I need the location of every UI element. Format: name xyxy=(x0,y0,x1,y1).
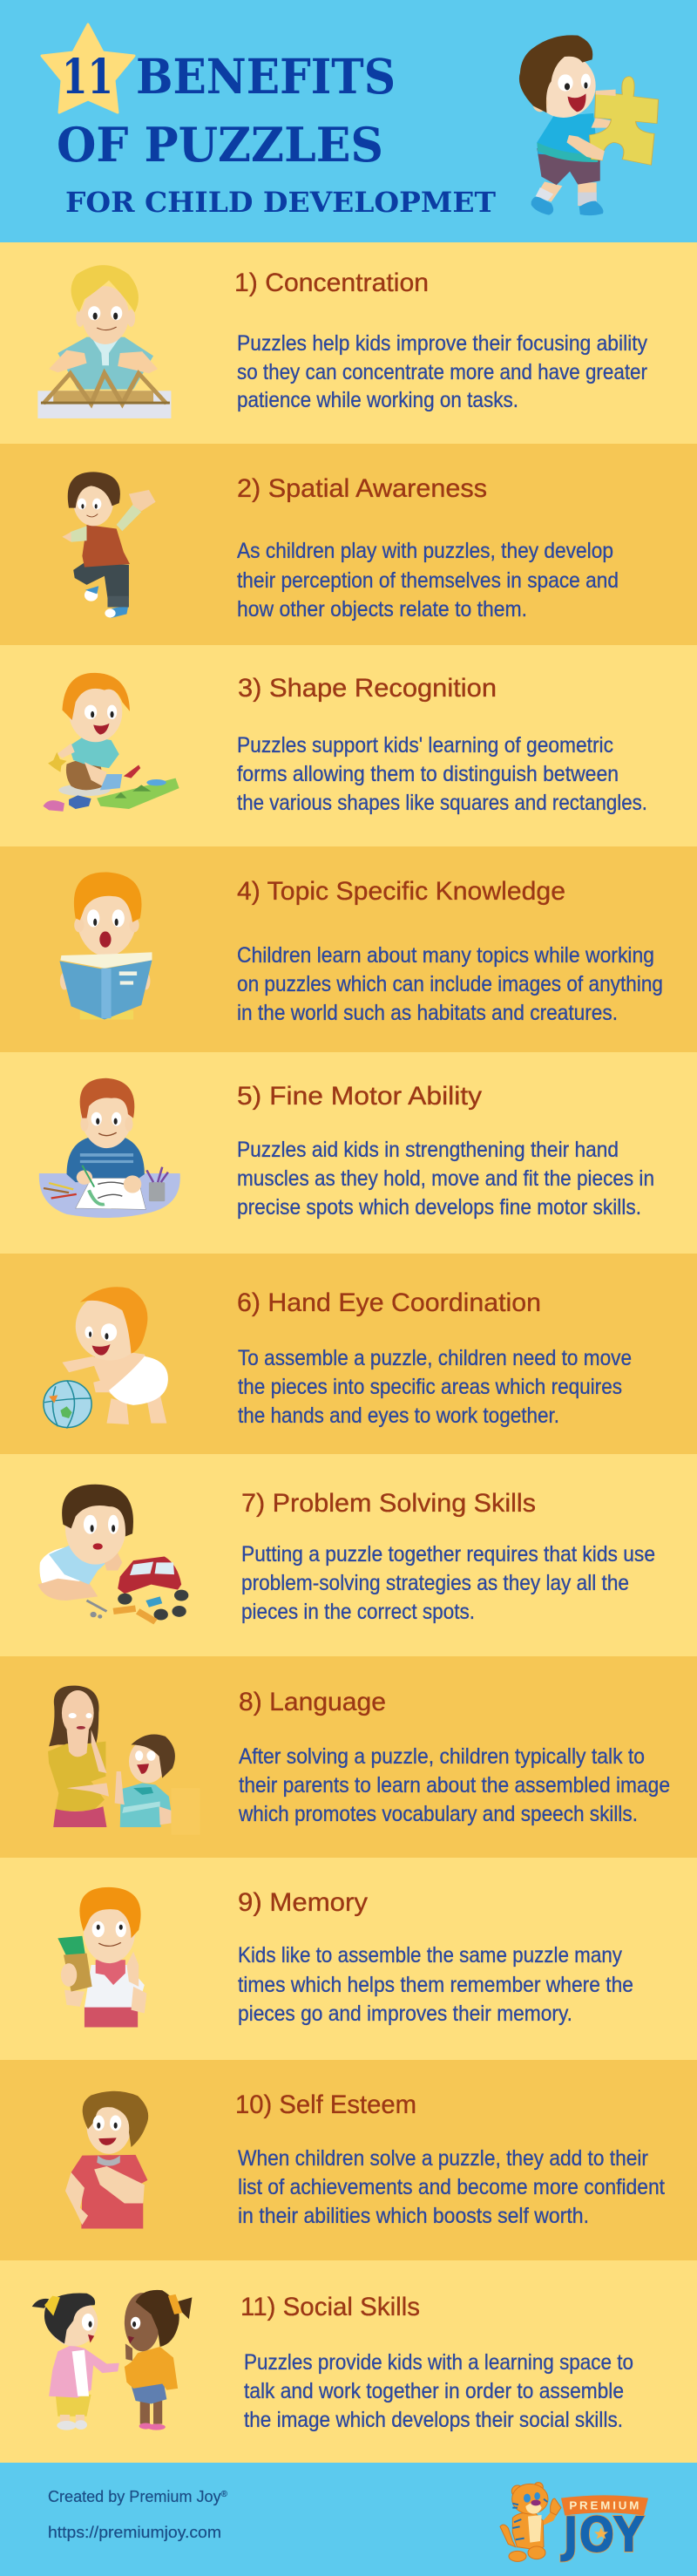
text block: which promotes vocabulary and speech skills. xyxy=(238,1802,638,1826)
heading: 3) Shape Recognition xyxy=(238,674,497,703)
text block: times which helps them remember where the xyxy=(238,1973,633,1997)
logo: Premium Joy tiger: JOY xyxy=(559,2507,646,2564)
credit text: ® xyxy=(221,2490,228,2499)
text block: When children solve a puzzle, they add to their xyxy=(238,2146,648,2171)
panel: 11 social skills xyxy=(0,2260,697,2463)
heading: 5) Fine Motor Ability xyxy=(237,1082,482,1111)
heading: 9) Memory xyxy=(238,1888,368,1917)
text block: the image which develops their social skills. xyxy=(244,2408,623,2432)
text block xyxy=(238,2146,665,2228)
illustration: boy building with sticks xyxy=(37,265,171,418)
text block: Putting a puzzle together requires that kids use xyxy=(241,1542,655,1567)
logo: Premium Joy tiger: PREMIUM xyxy=(569,2498,639,2511)
text block xyxy=(237,1138,654,1220)
title: FOR CHILD DEVELOPMET xyxy=(65,186,496,219)
heading: 7) Problem Solving Skills xyxy=(241,1489,536,1518)
illustration: boy reading book xyxy=(59,873,152,1020)
panel: 6 hand eye coordination xyxy=(0,1254,697,1454)
text block: list of achievements and become more confident xyxy=(238,2175,665,2199)
text block: patience while working on tasks. xyxy=(237,388,518,412)
text block: precise spots which develops fine motor skills. xyxy=(237,1195,641,1220)
panel: 5 fine motor ability xyxy=(0,1052,697,1254)
text block xyxy=(241,1542,655,1624)
text block: Puzzles help kids improve their focusing ability xyxy=(237,331,647,356)
text block: pieces in the correct spots. xyxy=(241,1600,475,1624)
text block: in their abilities which boosts self worth. xyxy=(238,2204,589,2228)
panel: 1 concentration xyxy=(0,242,697,444)
text block xyxy=(237,331,647,412)
illustration: boy balancing xyxy=(62,472,156,618)
panel: 7 problem solving skills xyxy=(0,1454,697,1656)
heading: 6) Hand Eye Coordination xyxy=(237,1288,541,1317)
text block xyxy=(238,1346,632,1428)
text block: Kids like to assemble the same puzzle many xyxy=(238,1943,622,1968)
panel: 10 self esteem xyxy=(0,2060,697,2260)
illustration: toddler with toy car xyxy=(37,1485,188,1621)
panel: header xyxy=(0,0,697,242)
title: BENEFITS xyxy=(136,48,396,105)
panel: 2 spatial awareness xyxy=(0,444,697,645)
text block: Children learn about many topics while working xyxy=(237,943,654,968)
credit text: https://premiumjoy.com xyxy=(48,2524,221,2541)
illustration: boy pointing at himself xyxy=(65,2091,148,2228)
illustration: boy drawing at table xyxy=(39,1078,180,1218)
text block xyxy=(238,1744,670,1826)
text block xyxy=(237,539,619,622)
logo: Premium Joy tiger xyxy=(500,2483,648,2564)
heading: 4) Topic Specific Knowledge xyxy=(237,877,565,906)
title xyxy=(57,48,496,219)
text block xyxy=(244,2350,633,2432)
text block: As children play with puzzles, they develop xyxy=(237,539,613,563)
title: 11 xyxy=(62,48,113,105)
panel: footer xyxy=(0,2463,697,2576)
panel: 4 topic specific knowledge xyxy=(0,846,697,1052)
heading: 8) Language xyxy=(239,1688,386,1716)
heading: 11) Social Skills xyxy=(240,2293,420,2321)
text block: Puzzles aid kids in strengthening their hand xyxy=(237,1138,619,1162)
panel: 8 language xyxy=(0,1656,697,1858)
icon: star behind 11 xyxy=(42,24,134,112)
text block xyxy=(238,1943,633,2026)
text block: so they can concentrate more and have greater xyxy=(237,360,647,384)
illustration: two girls talking xyxy=(32,2290,192,2430)
illustration: boy with shape sorter xyxy=(43,673,179,812)
panel: 3 shape recognition xyxy=(0,645,697,846)
text block xyxy=(237,943,663,1025)
text block: Puzzles support kids' learning of geometric xyxy=(237,733,613,758)
text block: talk and work together in order to assemble xyxy=(244,2379,624,2403)
text block: Puzzles provide kids with a learning space to xyxy=(244,2350,633,2375)
text block: the various shapes like squares and rectangles. xyxy=(237,791,647,815)
title: OF PUZZLES xyxy=(57,117,383,173)
heading: 1) Concentration xyxy=(234,268,429,297)
illustration: baby with ball xyxy=(44,1287,168,1429)
text block: To assemble a puzzle, children need to move xyxy=(238,1346,632,1370)
text block: the hands and eyes to work together. xyxy=(238,1404,559,1428)
text block: muscles as they hold, move and fit the pieces in xyxy=(237,1166,654,1191)
illustration: boy with envelope of money xyxy=(58,1887,146,2028)
panel: 9 memory xyxy=(0,1858,697,2060)
text block: problem-solving strategies as they lay all the xyxy=(241,1571,629,1595)
illustration: boy holding puzzle piece xyxy=(519,35,659,215)
credit text xyxy=(48,2488,228,2541)
heading: 2) Spatial Awareness xyxy=(237,474,487,503)
text block: pieces go and improves their memory. xyxy=(238,2002,572,2026)
text block: After solving a puzzle, children typically talk to xyxy=(239,1744,645,1769)
text block: their perception of themselves in space and xyxy=(237,568,619,593)
heading: 10) Self Esteem xyxy=(235,2090,416,2119)
text block: on puzzles which can include images of anything xyxy=(237,972,663,996)
text block: forms allowing them to distinguish between xyxy=(237,762,619,786)
illustration: mother and son talking xyxy=(48,1686,200,1835)
text block xyxy=(237,733,647,815)
text block: how other objects relate to them. xyxy=(237,597,527,622)
text block: in the world such as habitats and creatures. xyxy=(237,1001,618,1025)
credit text: Created by Premium Joy xyxy=(48,2488,220,2505)
text block: the pieces into specific areas which requires xyxy=(238,1375,622,1399)
